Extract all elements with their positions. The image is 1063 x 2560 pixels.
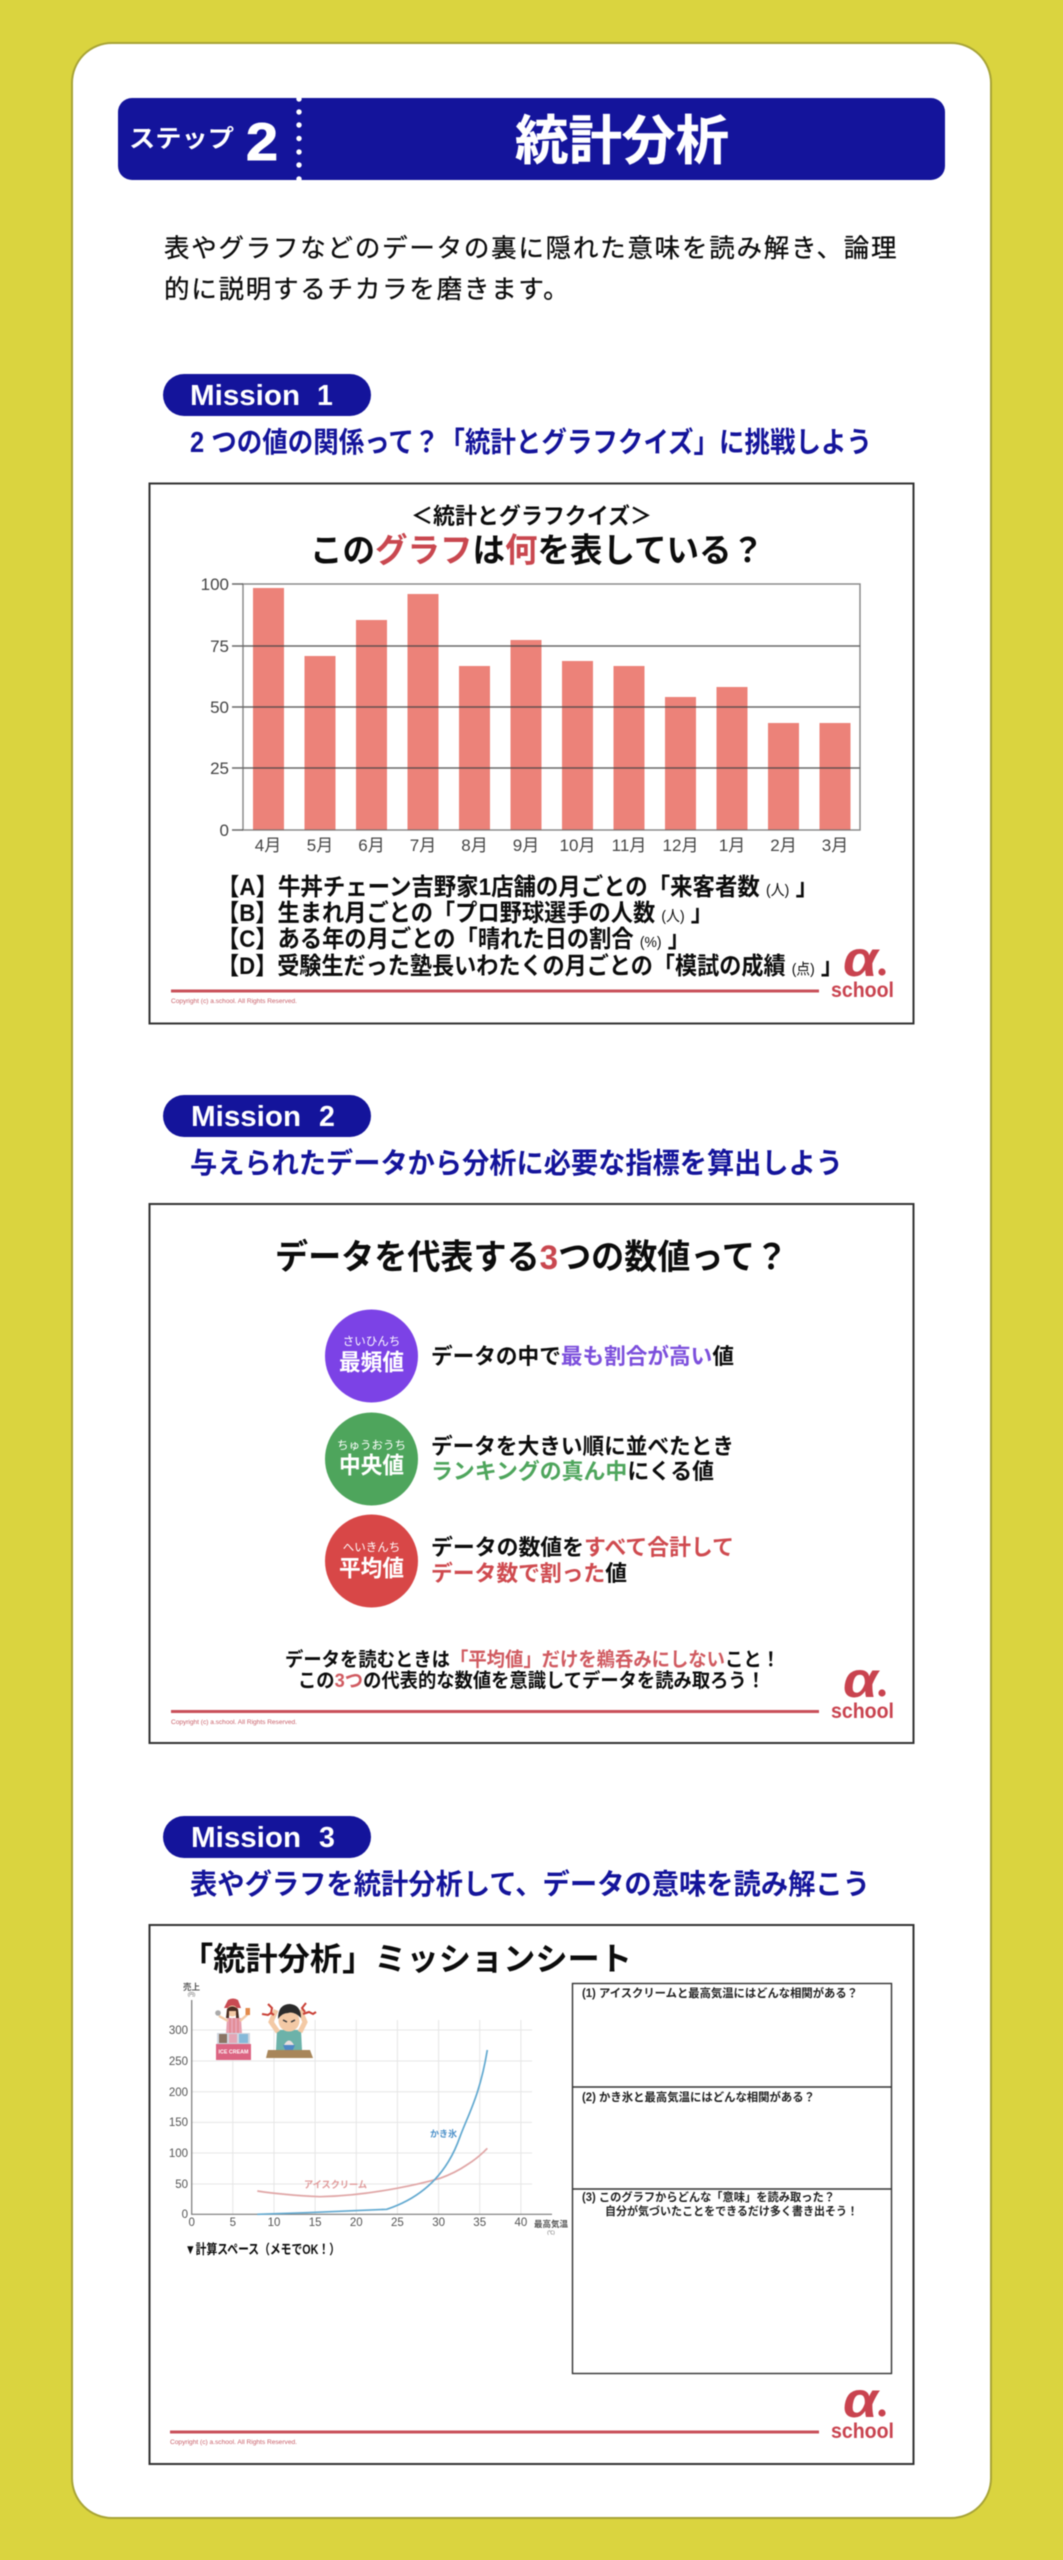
mean item: 平均値 <box>339 1555 404 1581</box>
logo: a.school: α <box>843 1652 880 1708</box>
x axis ticks: 30 <box>432 2217 445 2229</box>
logo: a.school <box>831 2372 894 2443</box>
label: ice cream: アイスクリーム <box>304 2180 367 2191</box>
mission 3 heading: 表やグラフを統計分析して、データの意味を読み解こう <box>190 1868 870 1901</box>
question 1: (1) アイスクリームと最高気温にはどんな相関がある？ <box>582 1986 858 2000</box>
step label: ステップ <box>129 125 235 153</box>
mission 2 pill <box>163 1095 371 1137</box>
x axis ticks: 35 <box>473 2217 486 2229</box>
y axis ticks: 100 <box>169 2148 188 2160</box>
takeaway text: この3つの代表的な数値を意識してデータを読み取ろう！ <box>298 1669 765 1692</box>
x axis ticks: 20 <box>350 2217 363 2229</box>
mission 1 heading: 2 つの値の関係って？「統計とグラフクイズ」に挑戦しよう <box>190 426 872 459</box>
panel: mission sheet <box>150 1925 914 2464</box>
curve: shaved ice <box>257 2050 487 2214</box>
x axis ticks: 15 <box>309 2217 321 2229</box>
icon: ice cream seller: ICE CREAM <box>218 2050 248 2056</box>
mode item <box>325 1310 734 1402</box>
x axis ticks: 0 <box>188 2217 195 2229</box>
y axis ticks: 300 <box>169 2025 188 2037</box>
x axis ticks: 25 <box>391 2217 404 2229</box>
y axis title: 売上 <box>183 1982 200 1992</box>
logo: a.school: α <box>843 2372 880 2428</box>
dotted separator <box>296 96 302 182</box>
mode item: データの中で最も割合が高い値 <box>431 1344 734 1369</box>
y axis title <box>183 1982 200 1998</box>
bar chart: 25 <box>210 759 229 778</box>
mission 1 pill: Mission <box>190 380 300 412</box>
answer choices: 【A】牛丼チェーン吉野家1店舗の月ごとの「来客者数 (人) 」 <box>217 873 818 901</box>
mean item: データ数で割った値 <box>431 1561 627 1586</box>
bar chart: 1月 <box>719 836 745 855</box>
mission 1 pill: 1 <box>317 380 333 412</box>
y axis ticks: 0 <box>182 2209 188 2221</box>
bar chart: 10月 <box>560 836 595 855</box>
median item: ちゅうおうち <box>337 1439 406 1452</box>
x axis ticks: 40 <box>515 2217 527 2229</box>
mission 2 heading: 与えられたデータから分析に必要な指標を算出しよう <box>190 1147 843 1180</box>
label: shaved ice: かき氷 <box>430 2128 457 2139</box>
bar chart: 5月 <box>307 836 333 855</box>
logo: a.school: school <box>831 1700 894 1723</box>
mode item: さいひんち <box>343 1335 400 1348</box>
panel heading: データを代表する3つの数値って？ <box>275 1238 788 1277</box>
bar chart: 0 <box>220 821 229 840</box>
footer line <box>171 990 819 992</box>
bar chart: 75 <box>210 637 229 656</box>
bar chart: 11月 <box>612 836 646 855</box>
bar chart <box>201 575 860 855</box>
answer choices <box>217 873 843 980</box>
mission 1 pill <box>163 374 371 416</box>
footer line <box>171 1710 819 1713</box>
y axis title: (円) <box>188 1992 196 1998</box>
mean item: データの数値をすべて合計して <box>431 1535 734 1560</box>
panel: three representative values <box>150 1204 914 1743</box>
bar chart: 4月 <box>255 836 281 855</box>
step number: 2 <box>246 113 278 172</box>
bar chart: 7月 <box>410 836 436 855</box>
logo: a.school: school <box>831 2420 894 2443</box>
question 2: (2) かき氷と最高気温にはどんな相関がある？ <box>582 2090 815 2104</box>
bar chart: 100 <box>201 575 229 594</box>
logo: a.school <box>831 1652 894 1723</box>
mean item <box>325 1514 734 1608</box>
mission 3 pill <box>163 1816 371 1858</box>
copyright: Copyright (c) a.school. All Rights Reserved. <box>171 998 297 1005</box>
x axis title: 最高気温 <box>534 2219 568 2229</box>
x axis title: (℃) <box>547 2230 555 2235</box>
answer choices: 【D】受験生だった塾長いわたくの月ごとの「模試の成績 (点) 」 <box>217 952 843 980</box>
answer boxes <box>572 1984 892 2374</box>
y axis ticks: 50 <box>175 2179 188 2191</box>
x axis ticks: 5 <box>230 2217 236 2229</box>
icon: boy with brain freeze <box>262 2003 316 2058</box>
mode item: 最頻値 <box>339 1349 404 1375</box>
median item: 中央値 <box>339 1452 404 1478</box>
copyright: Copyright (c) a.school. All Rights Reserved. <box>171 1719 297 1726</box>
takeaway text <box>285 1648 780 1692</box>
logo: a.school <box>831 931 894 1002</box>
question 3 <box>582 2190 858 2218</box>
question 3: (3) このグラフからどんな「意味」を読み取った？ <box>582 2190 835 2204</box>
panel: graph quiz <box>150 484 914 1024</box>
footer line <box>170 2430 819 2434</box>
bar chart: 50 <box>210 698 229 717</box>
mission 3 pill: 3 <box>319 1822 335 1854</box>
x axis ticks: 10 <box>268 2217 280 2229</box>
quiz question: このグラフは何を表している？ <box>310 533 764 570</box>
mission 2 pill: 2 <box>319 1101 335 1133</box>
bar chart: 8月 <box>461 836 488 855</box>
copyright: Copyright (c) a.school. All Rights Reserved. <box>170 2439 297 2446</box>
x axis title <box>534 2219 568 2235</box>
step title: 統計分析 <box>515 112 729 171</box>
bar chart: 3月 <box>822 836 848 855</box>
median item <box>325 1412 734 1506</box>
logo: a.school: α <box>843 931 880 987</box>
question 3: 自分が気づいたことをできるだけ多く書き出そう！ <box>605 2204 858 2218</box>
icon: ice cream seller <box>215 1998 251 2060</box>
x axis ticks <box>188 2217 527 2229</box>
logo: a.school: school <box>831 979 894 1002</box>
takeaway text: データを読むときは「平均値」だけを鵜呑みにしないこと！ <box>285 1648 780 1671</box>
mission 3 pill: Mission <box>191 1822 301 1854</box>
intro text: 的に説明するチカラを磨きます。 <box>164 276 570 304</box>
calculation space label: ▼計算スペース（メモでOK！） <box>185 2241 340 2257</box>
intro text: 表やグラフなどのデータの裏に隠れた意味を読み解き、論理 <box>164 235 898 263</box>
y axis ticks: 250 <box>169 2056 188 2068</box>
curve: ice cream <box>257 2148 487 2197</box>
mission 2 pill: Mission <box>191 1101 301 1133</box>
quiz label: ＜統計とグラフクイズ＞ <box>411 503 652 529</box>
step header bar <box>118 96 945 182</box>
bar chart: 6月 <box>358 836 385 855</box>
median item: データを大きい順に並べたとき <box>431 1434 734 1459</box>
mean item: へいきんち <box>343 1541 400 1554</box>
answer choices: 【C】ある年の月ごとの「晴れた日の割合 (%) 」 <box>217 925 690 953</box>
line chart: sales by temperature <box>169 1982 568 2235</box>
bar chart: 2月 <box>770 836 797 855</box>
bar chart: 12月 <box>663 836 698 855</box>
intro text <box>164 235 898 304</box>
y axis ticks: 150 <box>169 2117 188 2129</box>
y axis ticks <box>169 2025 188 2221</box>
bar chart: 9月 <box>513 836 539 855</box>
median item: ランキングの真ん中にくる値 <box>431 1459 714 1484</box>
answer choices: 【B】生まれ月ごとの「プロ野球選手の人数 (人) 」 <box>217 899 713 927</box>
sheet title: 「統計分析」ミッションシート <box>181 1941 632 1977</box>
y axis ticks: 200 <box>169 2087 188 2099</box>
